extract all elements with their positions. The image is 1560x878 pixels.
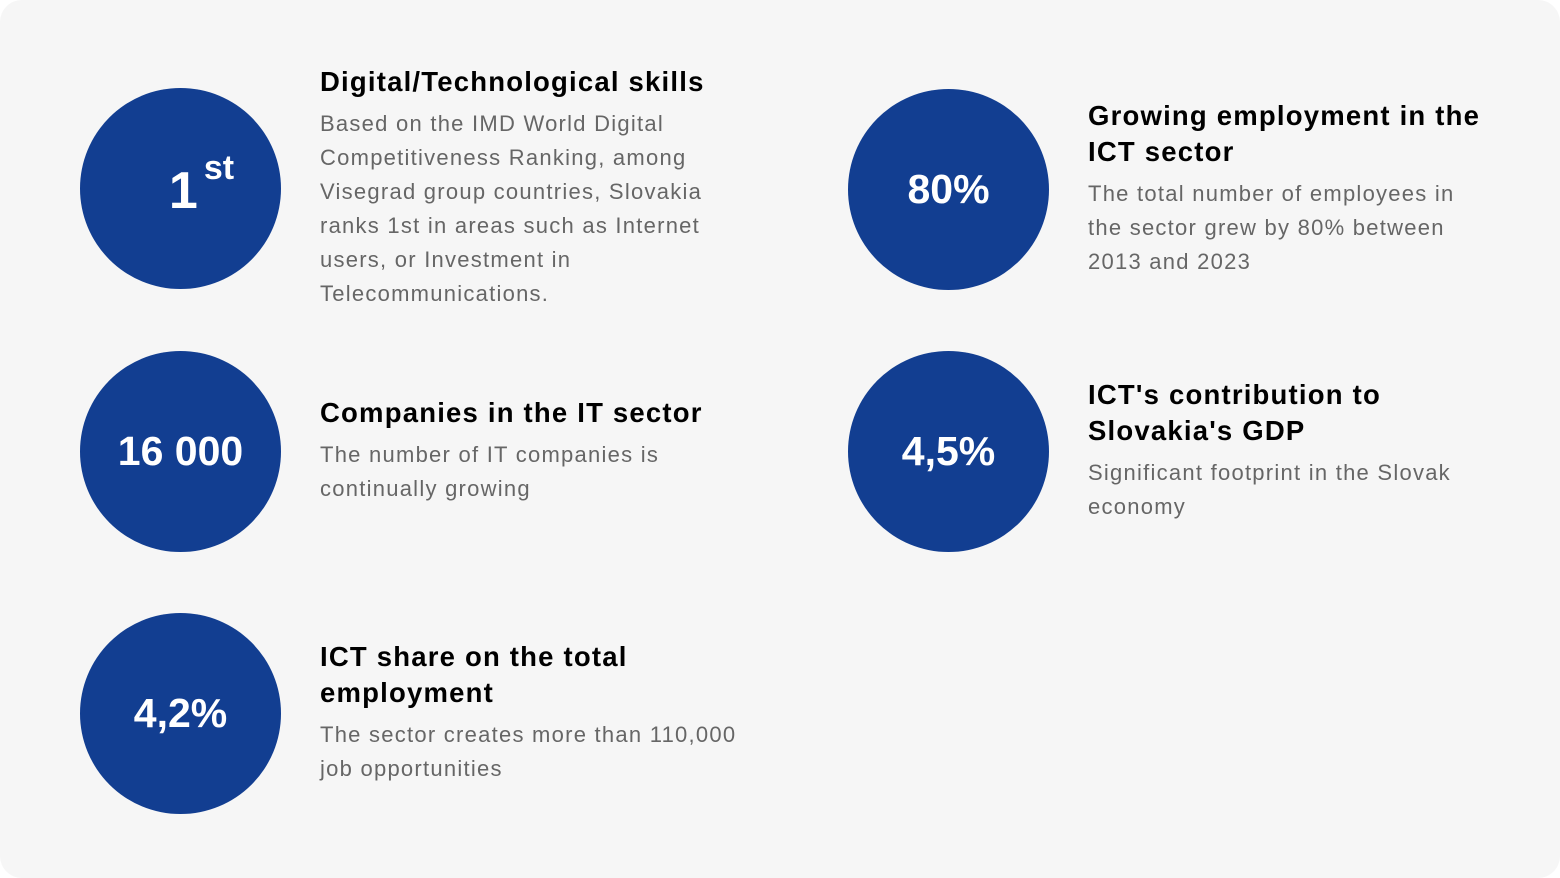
circle: 80% — [848, 89, 1049, 290]
heading: digital skills: Digital/Technological skills — [320, 66, 705, 97]
text: GDP — [1088, 460, 1451, 519]
text: companies: The number of IT companies is — [320, 442, 659, 467]
heading: GDP — [1088, 379, 1381, 446]
text: growing employment — [1088, 181, 1455, 274]
text: digital skills: ranks 1st in areas such as Internet — [320, 213, 700, 238]
circle: 16 000: 16 000 — [118, 428, 243, 474]
text: ICT share — [319, 722, 736, 781]
heading: growing employment — [1088, 100, 1480, 167]
heading: GDP: ICT's contribution to — [1088, 379, 1381, 410]
heading: ICT share — [320, 641, 628, 708]
text: digital skills: Based on the IMD World Digital — [320, 111, 664, 136]
circle: 4,2% — [80, 613, 281, 814]
block: growing employment — [1088, 100, 1480, 274]
circle: 4,5% — [848, 351, 1049, 552]
circle: 1st: 1 — [169, 162, 198, 220]
heading: ICT share: employment — [320, 677, 494, 708]
text: GDP: economy — [1088, 494, 1186, 519]
text: ICT share: job opportunities — [320, 756, 503, 781]
text: digital skills: Competitiveness Ranking, among — [320, 145, 686, 170]
text: growing employment: 2013 and 2023 — [1088, 249, 1251, 274]
block: ICT share — [319, 641, 736, 781]
text: digital skills — [320, 111, 702, 306]
block: digital skills — [320, 66, 705, 306]
block: GDP — [1088, 379, 1451, 519]
heading: growing employment: ICT sector — [1088, 136, 1234, 167]
text: companies: continually growing — [320, 476, 531, 501]
text: ICT share: The sector creates more than 110,000 — [320, 722, 736, 747]
circle: 4,5%: 4,5% — [902, 428, 995, 474]
heading: growing employment: Growing employment in the — [1088, 100, 1480, 131]
text: growing employment: the sector grew by 80% between — [1088, 215, 1445, 240]
text: GDP: Significant footprint in the Slovak — [1088, 460, 1451, 485]
circle: 1st — [80, 88, 281, 289]
text: companies — [320, 442, 659, 501]
circle: 4,2%: 4,2% — [134, 690, 227, 736]
heading: GDP: Slovakia's GDP — [1088, 415, 1305, 446]
block: companies — [320, 397, 703, 501]
text: digital skills: Telecommunications. — [320, 281, 549, 306]
circle: 80%: 80% — [907, 166, 990, 212]
text: digital skills: users, or Investment in — [320, 247, 571, 272]
circle: 16 000 — [80, 351, 281, 552]
heading: companies: Companies in the IT sector — [320, 397, 703, 428]
heading: ICT share: ICT share on the total — [320, 641, 628, 672]
text: growing employment: The total number of employees in — [1088, 181, 1455, 206]
text: digital skills: Visegrad group countries, Slovakia — [320, 179, 702, 204]
circle: 1st: st — [204, 149, 234, 187]
